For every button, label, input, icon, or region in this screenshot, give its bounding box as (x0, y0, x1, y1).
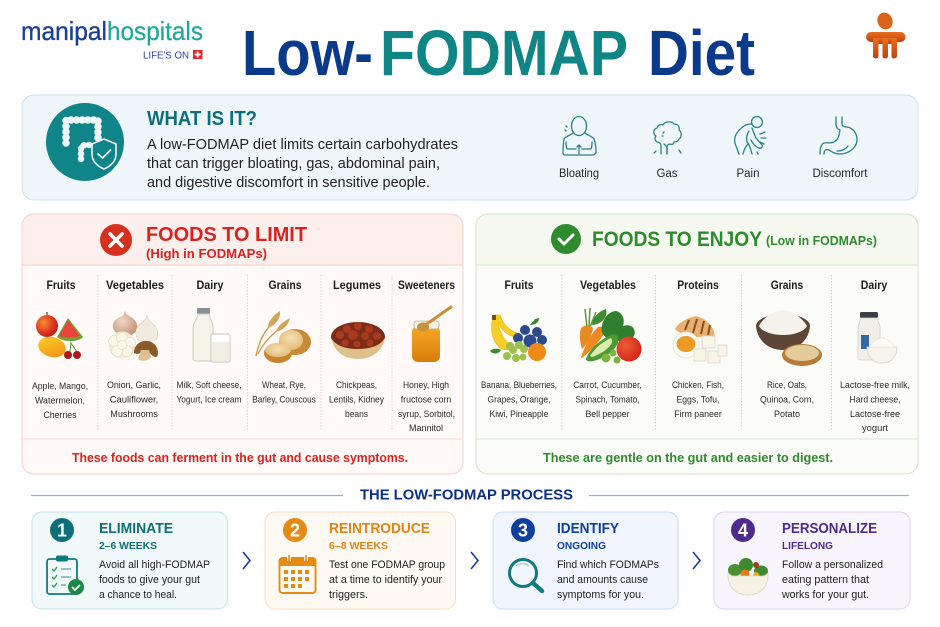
number badge 1: 1 (57, 520, 67, 540)
logo: hospital emblem (866, 10, 906, 58)
column: enjoy grains: Grains (771, 280, 803, 292)
column: limit grains: Barley, Couscous (252, 394, 316, 406)
icon: gas (654, 122, 681, 154)
number badge 3 (511, 518, 535, 542)
step text (557, 521, 659, 601)
column: limit fruits: Cherries (44, 410, 77, 421)
description text: A low-FODMAP diet limits certain carbohydrates (147, 137, 458, 153)
column: limit fruits (32, 280, 88, 421)
column: enjoy proteins: Eggs, Tofu, (676, 394, 720, 406)
card: step 4 personalize (714, 512, 910, 609)
column: enjoy fruits: Banana, Blueberries, (481, 380, 557, 391)
icon: honey jar (412, 307, 451, 362)
column: enjoy fruits: Fruits (504, 280, 534, 292)
arrow 2 (471, 552, 478, 569)
number badge 4 (731, 518, 755, 542)
card: step 2 reintroduce (265, 512, 456, 609)
number badge 1 (50, 518, 74, 542)
column: limit sweeteners: syrup, Sorbitol, (398, 409, 455, 420)
title: FODMAP (380, 17, 628, 89)
column: enjoy fruits: Kiwi, Pineapple (490, 409, 548, 420)
step text: works for your gut. (781, 589, 869, 601)
icon: checklist (47, 556, 84, 595)
icon: wheat and bread (256, 311, 311, 363)
number badge 2 (283, 518, 307, 542)
title: Diet (648, 17, 755, 89)
column: limit grains: Wheat, Rye, (262, 380, 306, 391)
step text: 2–6 WEEKS (99, 540, 157, 552)
column: enjoy grains: Rice, Oats, (767, 380, 807, 391)
description text (147, 137, 458, 191)
step text: eating pattern that (782, 574, 869, 586)
column: limit vegetables (106, 280, 164, 420)
column: limit dairy: Yogurt, Ice cream (176, 394, 242, 406)
card: step 1 eliminate (32, 512, 228, 609)
title (242, 17, 755, 89)
logo: manipalhospitals (21, 16, 203, 62)
logo: manipalhospitals: LIFE'S ON (143, 50, 189, 62)
icon: intestine with shield (46, 103, 124, 181)
icon: stomach (820, 117, 857, 154)
column: limit legumes: beans (345, 409, 368, 420)
arrow 1 (243, 552, 250, 569)
column: limit dairy: Milk, Soft cheese, (176, 380, 242, 391)
panel: foods to enjoy (476, 214, 918, 474)
panel: foods to limit (22, 214, 463, 474)
step text: Find which FODMAPs (557, 559, 659, 571)
step text: ELIMINATE (99, 521, 173, 537)
column: enjoy fruits: Grapes, Orange, (488, 394, 550, 406)
step text: triggers. (329, 589, 368, 601)
column: enjoy vegetables: Bell pepper (586, 409, 630, 420)
column: enjoy proteins: Proteins (677, 280, 719, 292)
column: enjoy grains: Quinoa, Corn, (760, 394, 814, 406)
step text: symptoms for you. (557, 589, 644, 601)
logo: manipalhospitals: hospitals (107, 16, 203, 46)
column: limit grains: Grains (268, 280, 302, 292)
number badge 3: 3 (518, 520, 528, 540)
label: gas: Gas (656, 168, 678, 180)
section heading: the low-fodmap process: THE LOW-FODMAP PROCESS (360, 488, 573, 504)
column: limit dairy: Dairy (196, 280, 224, 292)
icon: chicken egg tofu (673, 316, 727, 363)
heading: foods to limit: FOODS TO LIMIT (146, 224, 307, 246)
subheading: low in fodmaps: (Low in FODMAPs) (766, 234, 877, 248)
number badge 4: 4 (738, 520, 748, 540)
icon: milk and glass (193, 308, 230, 362)
icon: check badge (551, 224, 581, 254)
column: enjoy dairy: Lactose-free milk, (840, 380, 910, 391)
icon: pain (735, 116, 766, 154)
column: enjoy vegetables: Vegetables (580, 280, 636, 292)
icon: fruits (36, 312, 83, 360)
column: enjoy dairy: Dairy (861, 280, 888, 292)
heading: foods to enjoy: FOODS TO ENJOY (592, 228, 762, 251)
column: limit dairy (176, 280, 242, 406)
column: limit sweeteners: fructose corn (401, 394, 451, 406)
column: limit grains (252, 280, 316, 406)
column: enjoy vegetables: Carrot, Cucumber, (573, 380, 642, 391)
column: limit vegetables: Cauliflower, (110, 394, 158, 406)
column: limit sweeteners: Honey, High (403, 380, 449, 391)
step text: at a time to identify your (329, 574, 442, 586)
label: bloating: Bloating (559, 168, 599, 180)
column: limit vegetables: Onion, Garlic, (107, 380, 161, 391)
number badge 2: 2 (290, 520, 300, 540)
column: limit vegetables: Vegetables (106, 280, 164, 292)
column: enjoy proteins (672, 280, 727, 420)
icon: vegetables (580, 308, 642, 364)
column: enjoy dairy: yogurt (862, 423, 888, 434)
step text: Test one FODMAP group (329, 559, 445, 571)
column: limit vegetables: Mushrooms (110, 409, 158, 420)
description text: that can trigger bloating, gas, abdominal pain, (147, 156, 440, 172)
column: enjoy proteins: Firm paneer (674, 409, 722, 420)
icon: vegetables (108, 311, 158, 361)
column: enjoy vegetables (573, 280, 642, 420)
step text: and amounts cause (557, 574, 648, 586)
column: limit legumes: Lentils, Kidney (329, 394, 384, 406)
title: Low- (242, 17, 373, 89)
label: pain: Pain (736, 168, 760, 180)
column: enjoy grains: Potato (774, 409, 800, 420)
step text: foods to give your gut (99, 574, 200, 586)
step text: 6–8 WEEKS (329, 540, 388, 552)
icon: bowl of beans (331, 322, 385, 359)
step text: IDENTIFY (557, 521, 619, 537)
icon: calendar (279, 555, 316, 593)
step text (99, 521, 210, 601)
icon: magnifying glass (510, 560, 542, 591)
column: limit sweeteners: Mannitol (409, 423, 443, 434)
icon: bloating (563, 116, 596, 155)
arrow 3 (693, 552, 700, 569)
column: enjoy grains (756, 280, 822, 420)
icon: fruits (490, 315, 547, 362)
column: limit sweeteners: Sweeteners (398, 280, 455, 292)
step text: REINTRODUCE (329, 521, 430, 537)
step text: a chance to heal. (99, 589, 177, 601)
column: limit legumes (329, 280, 385, 420)
logo: manipalhospitals: manipal (21, 16, 107, 46)
step text: PERSONALIZE (782, 521, 877, 537)
column: limit sweeteners (398, 280, 455, 434)
heading: what is it: WHAT IS IT? (147, 108, 257, 130)
icon: lactose-free milk and yogurt (858, 312, 897, 363)
column: limit fruits: Watermelon, (35, 396, 85, 406)
card: step 3 identify (493, 512, 678, 609)
footer note: enjoy: These are gentle on the gut and easier to digest. (543, 450, 833, 465)
column: enjoy vegetables: Spinach, Tomato, (576, 394, 640, 406)
step text (781, 521, 883, 601)
column: limit legumes: Legumes (333, 280, 381, 292)
icon: cross badge (100, 224, 132, 256)
footer note: limit: These foods can ferment in the gut and cause symptoms. (72, 450, 408, 465)
column: enjoy fruits (481, 280, 557, 420)
column: limit fruits: Apple, Mango, (32, 381, 88, 392)
column: enjoy dairy: Lactose-free (850, 409, 900, 420)
step text: Avoid all high-FODMAP (99, 559, 210, 571)
panel: what is it (22, 95, 918, 200)
column: enjoy proteins: Chicken, Fish, (672, 380, 724, 391)
column: limit fruits: Fruits (46, 280, 76, 292)
icon: salad bowl (728, 558, 768, 595)
step text: Follow a personalized (782, 559, 883, 571)
step text: ONGOING (557, 540, 606, 552)
column: limit legumes: Chickpeas, (336, 380, 377, 391)
description text: and digestive discomfort in sensitive people. (147, 175, 430, 191)
step text (329, 521, 445, 601)
column: enjoy dairy (840, 280, 910, 434)
step text: LIFELONG (782, 540, 833, 552)
column: enjoy dairy: Hard cheese, (850, 394, 900, 406)
label: discomfort: Discomfort (812, 168, 868, 180)
icon: rice bowl and oats (756, 310, 822, 366)
subheading: high in fodmaps: (High in FODMAPs) (146, 246, 267, 261)
